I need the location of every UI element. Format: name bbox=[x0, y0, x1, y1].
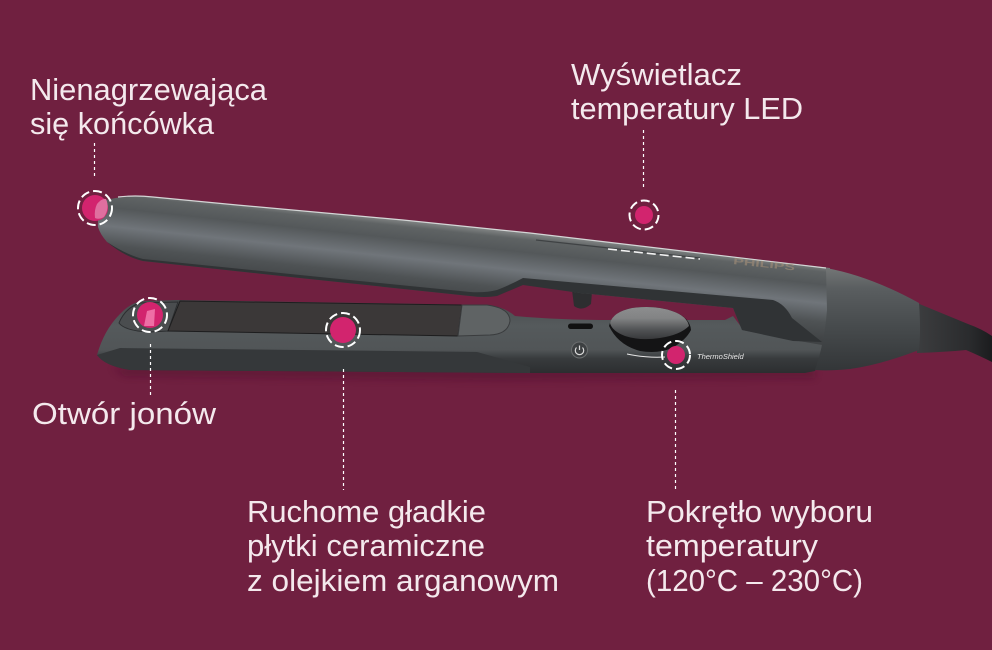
marker: temperature dial bbox=[662, 341, 690, 369]
label: LED display bbox=[571, 57, 803, 126]
ThermoShield logo: ThermoShield bbox=[697, 352, 745, 361]
ion outlet recess bbox=[119, 302, 178, 332]
LED display strip bbox=[536, 240, 700, 259]
label: temperature dial: temperatury bbox=[646, 528, 819, 563]
label: ceramic plates: z olejkiem arganowym bbox=[247, 563, 559, 598]
Philips logo: PHILIPS bbox=[733, 256, 795, 272]
label: non-heating tip: Nienagrzewająca bbox=[30, 72, 268, 107]
lower arm bbox=[97, 300, 830, 373]
label: non-heating tip bbox=[30, 72, 268, 141]
dial scale bbox=[627, 354, 665, 357]
collar bbox=[815, 268, 920, 370]
label: temperature dial: Pokrętło wyboru bbox=[646, 494, 873, 529]
label: ceramic plates: płytki ceramiczne bbox=[247, 528, 485, 563]
label: ceramic plates bbox=[247, 494, 559, 598]
upper arm bbox=[98, 196, 830, 345]
marker: ion outlet bbox=[133, 298, 167, 332]
label: temperature dial bbox=[646, 494, 873, 598]
label: LED display: temperatury LED bbox=[571, 91, 803, 126]
shadow bbox=[112, 368, 815, 380]
pivot bbox=[572, 290, 592, 309]
label: non-heating tip: się końcówka bbox=[30, 106, 215, 141]
temperature knob bbox=[609, 307, 691, 352]
power button bbox=[572, 342, 588, 358]
label: temperature dial: (120°C – 230°C) bbox=[646, 563, 863, 598]
ceramic plate bbox=[168, 301, 462, 336]
label: ion outlet: Otwór jonów bbox=[32, 396, 217, 431]
marker: ceramic plates bbox=[326, 313, 360, 347]
marker: LED display bbox=[630, 200, 658, 230]
leader lines bbox=[94, 130, 676, 490]
marker: non-heating tip bbox=[78, 191, 112, 225]
label: ceramic plates: Ruchome gładkie bbox=[247, 494, 486, 529]
LED slot bbox=[568, 324, 593, 329]
hair straightener bbox=[97, 196, 992, 380]
cord bbox=[917, 303, 992, 362]
label: LED display: Wyświetlacz bbox=[571, 57, 742, 92]
plate end pad bbox=[458, 305, 510, 336]
